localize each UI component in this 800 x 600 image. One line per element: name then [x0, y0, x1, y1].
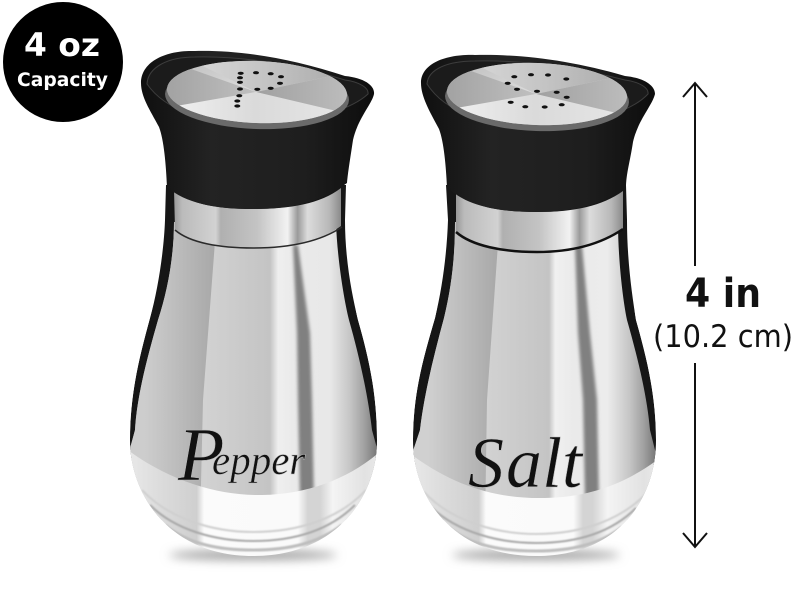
arrow: down	[683, 363, 707, 547]
height label: inches: 4 in	[685, 271, 761, 317]
pepper black cap	[141, 51, 374, 209]
pepper lid holes	[234, 71, 284, 108]
salt shaker body	[400, 185, 663, 525]
salt black cap	[421, 55, 655, 212]
shadow under pepper shaker	[169, 550, 337, 560]
badge: Capacity: Capacity	[17, 69, 109, 91]
salt lid holes	[505, 73, 570, 109]
capacity badge	[3, 2, 123, 122]
pepper cap rim highlight	[147, 57, 368, 124]
arrow: up	[683, 83, 707, 266]
pepper shaker glass base	[130, 452, 376, 556]
salt lid lip	[444, 64, 630, 134]
height dimension	[653, 83, 793, 547]
salt label: S	[468, 423, 504, 503]
pepper metal band	[174, 188, 341, 248]
pepper shaker body	[120, 185, 385, 525]
badge: 4 oz: 4 oz	[24, 26, 100, 64]
salt metal lid	[447, 62, 627, 126]
pepper shaker	[120, 51, 385, 560]
salt metal band	[456, 191, 623, 252]
salt shaker	[400, 55, 663, 560]
pepper label: epper	[212, 437, 306, 483]
height label: centimetres: (10.2 cm)	[653, 319, 793, 355]
pepper metal lid	[167, 60, 347, 124]
salt label: alt	[506, 423, 584, 503]
pepper label: P	[177, 413, 224, 497]
salt band groove	[456, 229, 623, 252]
shadow under salt shaker	[452, 550, 620, 560]
pepper lid lip	[164, 62, 350, 132]
salt cap and lid	[421, 55, 655, 212]
salt cap rim highlight	[427, 61, 648, 126]
pepper band groove	[175, 227, 342, 248]
salt shaker glass base	[414, 456, 654, 556]
